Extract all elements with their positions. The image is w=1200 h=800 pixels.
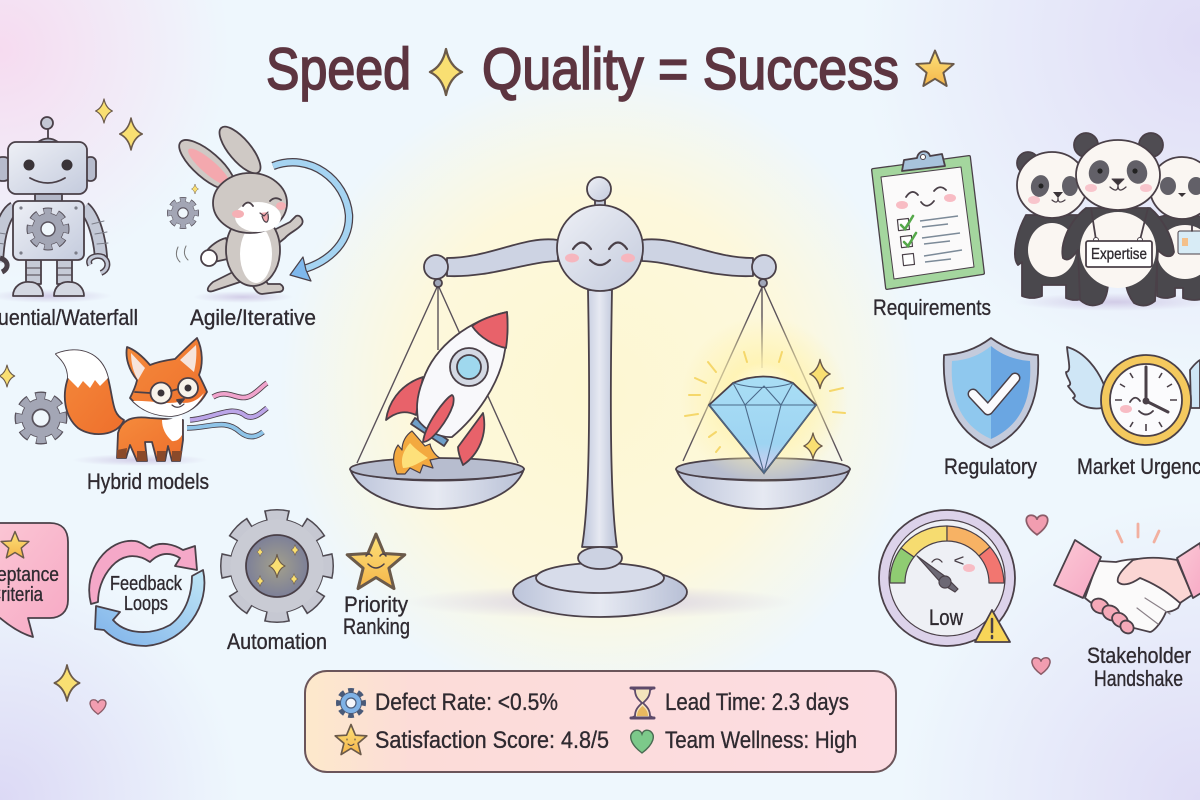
label: Requirements: Requirements xyxy=(873,295,991,320)
feedback loops xyxy=(89,541,204,646)
title xyxy=(266,37,899,102)
speech bubble: Acceptance Criteria xyxy=(0,523,68,637)
icon: title star xyxy=(916,50,954,86)
label: Priority Ranking xyxy=(343,592,410,639)
icon: heart xyxy=(631,730,653,753)
icon: star xyxy=(335,724,367,755)
left pan xyxy=(350,458,524,509)
metric: Lead Time: Lead Time: 2.3 days xyxy=(665,689,849,716)
fox: Hybrid models xyxy=(21,338,267,466)
rocket xyxy=(386,312,508,474)
feedback loops: Feedback xyxy=(110,573,183,595)
label: Agile/Iterative: Agile/Iterative xyxy=(190,305,316,330)
icon: heart xyxy=(1026,515,1048,535)
feedback loops: Loops xyxy=(124,593,168,615)
clipboard: Requirements xyxy=(873,151,983,288)
icon: title sparkle xyxy=(430,49,462,95)
icon: sparkle xyxy=(54,665,80,701)
scale strings xyxy=(357,285,842,463)
smiling head xyxy=(557,177,643,291)
left panda xyxy=(1015,152,1087,300)
balance scale xyxy=(350,177,850,619)
icon: gear xyxy=(340,692,362,714)
metric: Team Wellness: Team Wellness: High xyxy=(665,727,857,754)
metric: Defect Rate: Defect Rate: <0.5% xyxy=(375,689,558,716)
icon: sparkle xyxy=(120,118,142,150)
title: Speed xyxy=(266,37,411,102)
rabbit: Agile/Iterative xyxy=(171,121,349,303)
label: Priority Ranking: Priority xyxy=(344,592,408,617)
gauge: Low: Low xyxy=(929,605,963,630)
right panda xyxy=(1150,157,1200,300)
icon: sparkle xyxy=(96,99,112,123)
winged clock: Market Urgency xyxy=(1066,347,1200,445)
priority star xyxy=(347,534,405,589)
robot: Sequential/Waterfall xyxy=(0,117,112,303)
metric: Satisfaction Score: Satisfaction Score: 4.8/5 xyxy=(375,727,609,754)
handshake: Stakeholder Handshake xyxy=(1054,524,1200,636)
panel: metrics xyxy=(305,671,896,772)
right pan xyxy=(676,458,850,509)
label: Priority Ranking: Ranking xyxy=(343,614,410,639)
center panda xyxy=(1062,133,1174,306)
shield: Regulatory xyxy=(944,338,1038,448)
title: Quality = Success xyxy=(482,37,899,102)
label: Hybrid models: Hybrid models xyxy=(87,469,209,494)
label: Regulatory: Regulatory xyxy=(944,454,1037,479)
automation gear xyxy=(230,518,324,614)
diamond with glow xyxy=(680,316,848,484)
icon: heart xyxy=(90,700,106,714)
scale beam xyxy=(424,239,776,287)
scale base xyxy=(513,290,687,617)
icon: hourglass xyxy=(631,688,654,718)
center panda: Expertise xyxy=(1091,246,1147,263)
icon: sparkle xyxy=(0,365,15,387)
label: Stakeholder Handshake xyxy=(1087,643,1191,691)
gauge: Low xyxy=(879,510,1015,646)
label: Automation: Automation xyxy=(227,629,327,654)
icon: heart xyxy=(1032,658,1050,674)
pandas: Expertise xyxy=(1015,133,1200,311)
